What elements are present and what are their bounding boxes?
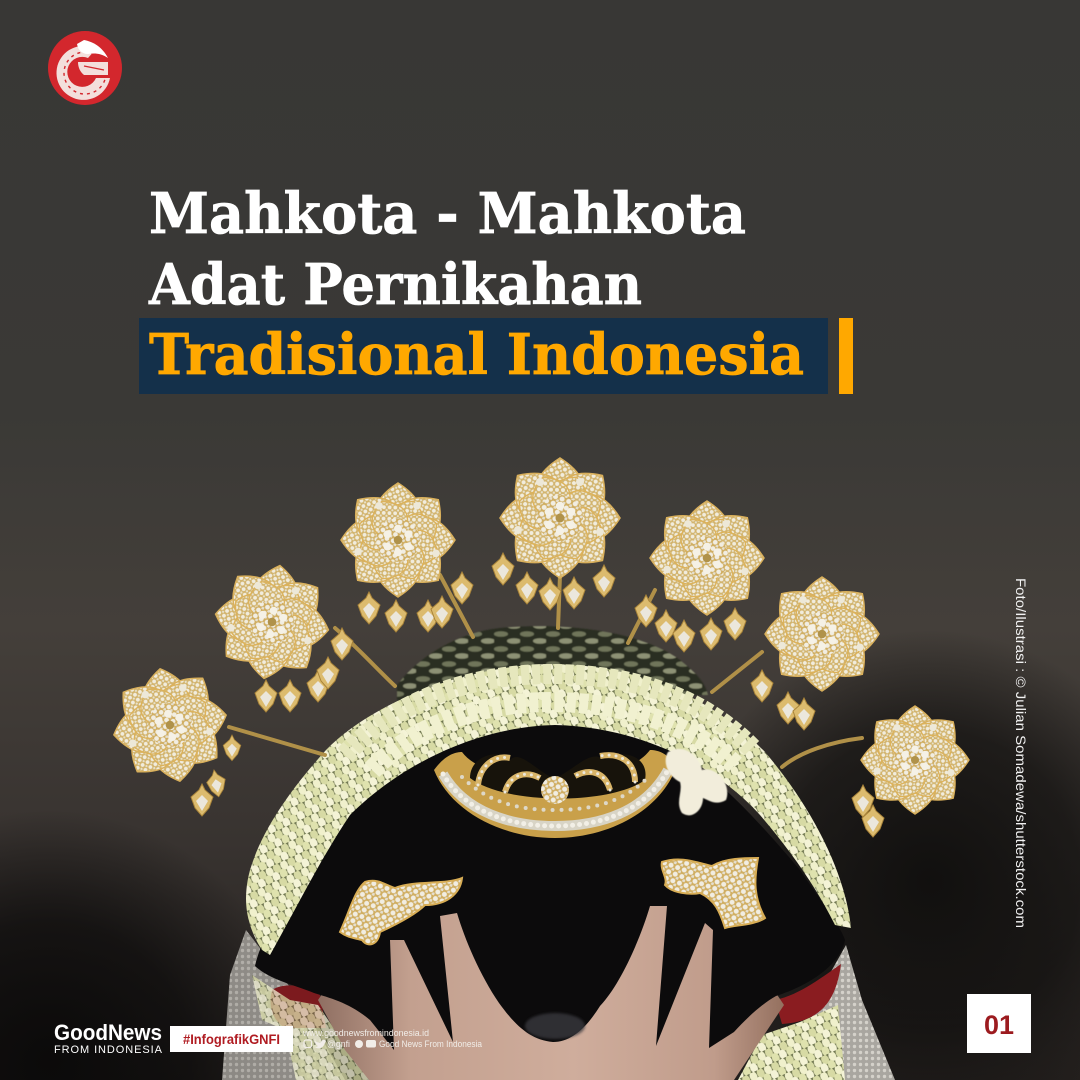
title highlight box [139,318,828,394]
hair sheen [525,1013,585,1039]
social media links: @gnfi [327,1039,350,1049]
title line 1: Mahkota - Mahkota [149,181,746,247]
social media links: Good News From Indonesia [379,1039,482,1049]
red ribbons [271,964,841,1028]
lower jasmine strands [252,975,845,1080]
white jasmine flower [666,749,727,815]
hashtag tag: #InfografikGNFI [183,1032,280,1047]
icon: twitter [315,1040,326,1048]
page number box [967,994,1031,1053]
black hair [255,723,845,1050]
hashtag tag [170,1026,293,1052]
logo: GNFI garuda emblem [48,31,122,105]
page number box: 01 [984,1010,1014,1040]
title line 2: Adat Pernikahan [148,252,642,318]
skin [318,880,784,1080]
gold crescent ornament [434,750,676,838]
jasmine garland top layer [397,626,708,700]
gold flower pin 2 [208,558,353,712]
right hair clip [662,858,765,928]
gold flower pin 4 [492,458,620,610]
photo credit: Foto/Ilustrasi : © Julian Somadewa/shutterstock.com [1013,578,1029,928]
bride headdress photo illustration [104,458,969,1080]
icon: youtube [366,1040,376,1048]
title [139,181,853,394]
social media links: www.goodnewsfromindonesia.id [302,1028,429,1038]
jasmine garland [246,664,851,955]
footer brand logotype [54,1020,163,1056]
social media links [302,1028,482,1049]
gold flower pin 3 [341,483,473,632]
left hair clip [340,878,462,944]
title line 3: Tradisional Indonesia [149,322,804,388]
footer brand logotype: GoodNews [54,1020,162,1045]
gold flower pin 6 [751,577,879,730]
veil [222,930,895,1080]
gold flower pin 5 [635,501,764,652]
crown hairpin rods [229,575,862,767]
jasmine bud rows [345,674,752,755]
title highlight accent bar [839,318,853,394]
icon: facebook [355,1040,363,1048]
footer brand logotype: FROM INDONESIA [54,1044,163,1056]
gold flower pin 1 [104,659,241,816]
icon: instagram [304,1040,312,1048]
gold flower pin 7 [852,706,969,837]
